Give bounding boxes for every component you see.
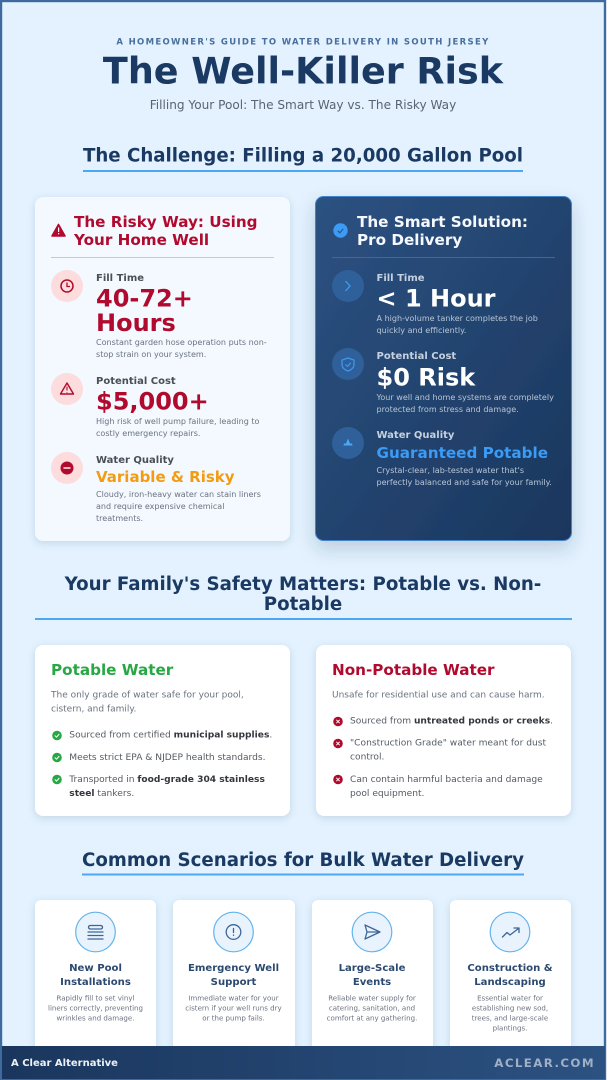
smart: water quality <box>332 427 552 487</box>
risky: fill time: 40-72+ <box>96 284 193 312</box>
non-potable list: control. <box>350 752 384 762</box>
risky: fill time <box>51 270 267 359</box>
card: construction and landscaping: establishing new sod, <box>472 1004 548 1012</box>
heading: family safety: Potable <box>264 594 342 615</box>
card: large-scale events: catering, sanitation, and <box>329 1004 415 1012</box>
non-potable list: "Construction Grade" water meant for dust <box>350 738 546 748</box>
risky: fill time: Hours <box>96 309 176 337</box>
non-potable list <box>333 716 553 799</box>
smart: potential cost <box>332 348 554 414</box>
footer url: ACLEAR.COM <box>494 1056 595 1070</box>
smart solution heading: Pro Delivery <box>357 231 462 249</box>
potable list <box>52 730 272 799</box>
card: new pool installations: New Pool <box>69 963 122 974</box>
panel: the risky way <box>35 197 290 541</box>
card: emergency well support: Support <box>211 977 256 988</box>
card: emergency well support: cistern if your well runs dry <box>185 1004 282 1012</box>
card: emergency well support <box>173 900 295 1060</box>
non-potable list: Can contain harmful bacteria and damage <box>350 775 543 785</box>
risky: potential cost: High risk of well pump failure, leading to <box>96 417 260 426</box>
risky: water quality <box>51 452 261 523</box>
card: large-scale events: comfort at any gathering. <box>327 1014 417 1023</box>
card: large-scale events: Large-Scale <box>339 963 406 974</box>
smart: potential cost: protected from stress and damage. <box>376 405 519 414</box>
icon: pool layers <box>76 912 115 952</box>
risky: fill time: Constant garden hose operation puts non- <box>96 338 267 347</box>
icon: trending up <box>490 912 530 952</box>
heading: family safety <box>35 574 572 620</box>
smart: fill time: < 1 Hour <box>376 284 496 312</box>
risky: fill time: stop strain on your system. <box>96 350 206 359</box>
card: emergency well support: or the pump fails. <box>202 1014 265 1023</box>
risky: fill time: Fill Time <box>96 273 144 284</box>
card: emergency well support: Immediate water for your <box>188 993 279 1002</box>
smart: fill time: Fill Time <box>376 273 425 284</box>
non-potable list: Sourced from untreated ponds or creeks. <box>350 716 553 726</box>
non-potable description: Unsafe for residential use and can cause harm. <box>332 690 545 700</box>
smart: fill time: quickly and efficiently. <box>376 326 466 335</box>
card: large-scale events <box>312 900 433 1060</box>
footer brand: A Clear Alternative <box>11 1058 118 1069</box>
card: new pool installations: liners correctly, preventing <box>48 1004 143 1012</box>
potable list: Transported in food-grade 304 stainless <box>68 775 265 785</box>
eyebrow: A HOMEOWNER'S GUIDE TO WATER DELIVERY IN SOUTH JERSEY <box>116 38 490 48</box>
panel: the smart solution <box>316 196 572 540</box>
card: new pool installations: Rapidly fill to set vinyl <box>57 993 135 1002</box>
heading: common scenarios: Common Scenarios for Bulk Water Delivery <box>82 850 524 871</box>
footer <box>2 1046 605 1079</box>
card: new pool installations: Installations <box>60 977 131 988</box>
smart: potential cost: Potential Cost <box>376 351 456 362</box>
potable list: Meets strict EPA & NJDEP health standards. <box>69 753 266 763</box>
potable list: Sourced from certified municipal supplies. <box>69 730 272 740</box>
smart: potential cost: Your well and home systems are completely <box>376 393 554 402</box>
risky: potential cost: Potential Cost <box>96 376 176 387</box>
non-potable list: pool equipment. <box>350 789 424 799</box>
potable heading: Potable Water <box>51 661 174 679</box>
header <box>103 38 504 112</box>
card: construction and landscaping <box>450 900 571 1060</box>
icon: alert circle <box>214 912 253 952</box>
risky way heading: The Risky Way: Using <box>74 213 258 231</box>
smart: water quality: perfectly balanced and safe for your family. <box>376 478 552 487</box>
non-potable heading: Non-Potable Water <box>332 661 495 679</box>
risky: water quality: Variable & Risky <box>96 468 235 486</box>
card: construction and landscaping: Landscaping <box>474 977 546 988</box>
subtitle: Filling Your Pool: The Smart Way vs. The Risky Way <box>150 98 456 112</box>
smart: fill time: A high-volume tanker completes the job <box>376 314 538 323</box>
icon: check badge <box>333 223 348 238</box>
smart: fill time <box>332 270 538 335</box>
title: The Well-Killer Risk <box>103 50 504 92</box>
risky: potential cost <box>51 373 260 438</box>
heading: family safety: Your Family's Safety Matters: Potable vs. Non- <box>64 574 541 595</box>
card: construction and landscaping: plantings. <box>493 1024 527 1033</box>
smart: water quality: Water Quality <box>376 430 455 441</box>
potable description: The only grade of water safe for your pool, <box>50 690 244 700</box>
card: emergency well support: Emergency Well <box>188 963 279 974</box>
card: construction and landscaping: trees, and large-scale <box>472 1014 548 1023</box>
potable list: steel tankers. <box>69 789 134 799</box>
panel: non-potable water <box>316 645 571 816</box>
panel: potable water <box>35 645 290 816</box>
card: construction and landscaping: Essential water for <box>477 993 543 1002</box>
smart: water quality: Crystal-clear, lab-tested water that's <box>376 466 524 475</box>
icon: warning triangle <box>52 224 65 236</box>
card: large-scale events: Events <box>353 977 391 988</box>
icon: send arrow <box>352 912 392 952</box>
card: new pool installations: wrinkles and damage. <box>57 1014 134 1023</box>
risky: water quality: Cloudy, iron-heavy water can stain liners <box>96 490 261 499</box>
card: large-scale events: Reliable water supply for <box>328 993 416 1002</box>
risky way heading: Your Home Well <box>73 231 209 249</box>
smart: water quality: Guaranteed Potable <box>376 444 548 462</box>
card: construction and landscaping: Construction & <box>467 963 553 974</box>
smart solution heading: The Smart Solution: <box>357 213 528 231</box>
risky: water quality: and require expensive chemical <box>96 502 224 511</box>
risky: water quality: Water Quality <box>96 455 174 466</box>
heading: the challenge: The Challenge: Filling a 20,000 Gallon Pool <box>83 146 523 167</box>
risky: potential cost: costly emergency repairs. <box>96 429 200 438</box>
risky: potential cost: $5,000+ <box>96 388 209 416</box>
smart: potential cost: $0 Risk <box>376 364 476 392</box>
card: new pool installations <box>35 900 156 1060</box>
risky: water quality: treatments. <box>96 514 143 523</box>
potable description: cistern, and family. <box>51 704 136 714</box>
